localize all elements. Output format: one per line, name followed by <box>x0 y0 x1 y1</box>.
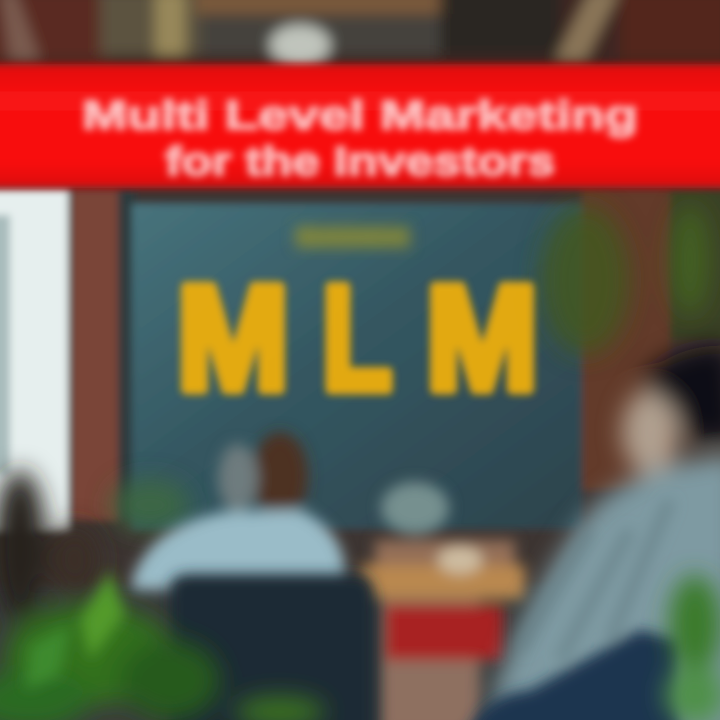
red title banner <box>0 64 720 188</box>
title: Multi Level Marketing <box>82 92 638 138</box>
board subtitle: Business <box>294 221 410 251</box>
plant behind board <box>110 205 710 531</box>
brick pillar left <box>72 190 122 520</box>
board heading: MLM: L <box>322 256 392 421</box>
board heading: MLM: M <box>177 256 289 421</box>
right wall <box>582 190 672 490</box>
seated person right <box>490 345 720 720</box>
plants left <box>0 470 325 720</box>
board <box>132 204 582 529</box>
ceiling with beams <box>0 0 720 75</box>
board heading: MLM: M <box>426 256 538 421</box>
title <box>82 92 638 184</box>
seated person centre <box>132 432 345 590</box>
back wall, pillars and board <box>0 185 720 585</box>
foreground: table, people, plants <box>0 345 720 720</box>
white column <box>0 190 68 530</box>
title: for the Investors <box>165 138 555 184</box>
chair <box>170 574 375 720</box>
plant right <box>665 575 720 720</box>
table <box>360 482 525 720</box>
board heading: MLM <box>177 256 538 421</box>
